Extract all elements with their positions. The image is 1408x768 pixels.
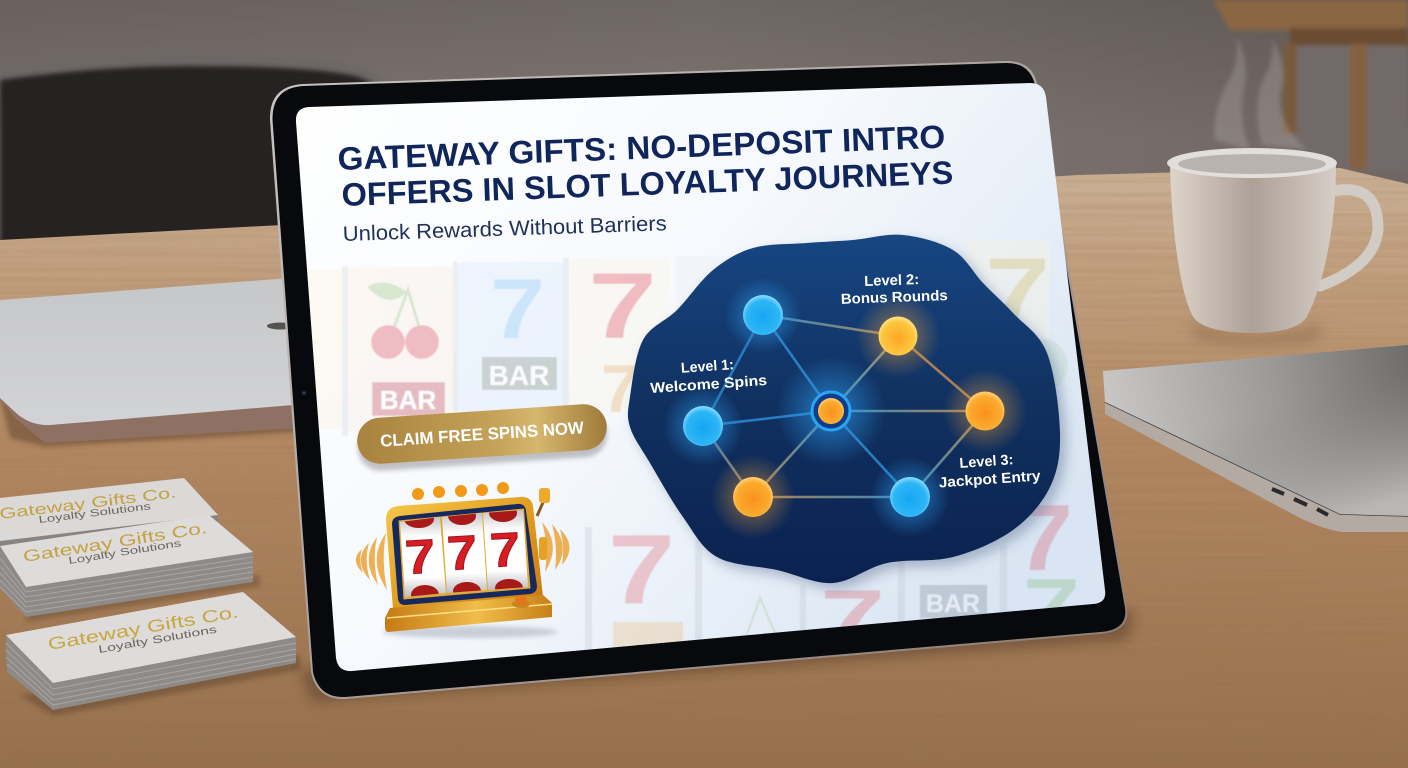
- camera dot: [302, 391, 306, 395]
- card stack 2: [0, 515, 260, 622]
- title: GATEWAY GIFTS: NO-DEPOSIT INTRO: [337, 119, 946, 177]
- blue seven: 7: [490, 262, 545, 357]
- card stack 1: [0, 478, 218, 555]
- sevens: 7: [404, 530, 437, 585]
- node: yellow: [878, 316, 918, 356]
- node: orange right: [966, 392, 1004, 430]
- label: level 1: Welcome Spins: [650, 373, 768, 397]
- card stack 2: Gateway Gifts Co.: [22, 520, 208, 566]
- label: level 1: [650, 360, 766, 393]
- node glows: [663, 277, 1027, 539]
- tablet: [270, 61, 1127, 699]
- business cards: [0, 478, 300, 716]
- label: level 3: Level 3:: [959, 452, 1014, 472]
- title: [338, 126, 952, 206]
- faded slot reels background, bottom row: 7: [820, 576, 885, 656]
- light bulbs: [412, 482, 509, 500]
- card stack 1: Gateway Gifts Co.: [0, 484, 177, 523]
- steam above the mug: [1215, 36, 1308, 150]
- node: blue left: [683, 406, 723, 446]
- label: level 2: Bonus Rounds: [841, 288, 948, 308]
- sound waves: [356, 522, 570, 590]
- card stack 3: [6, 592, 300, 716]
- tablet shadow on desk: [300, 610, 1135, 702]
- reels: [400, 510, 528, 597]
- node: orange bottom: [733, 477, 773, 517]
- tablet black bezel: [272, 63, 1125, 697]
- label: level 1: Level 1:: [680, 357, 734, 377]
- sevens: [406, 532, 518, 574]
- tablet metal edge: [270, 61, 1127, 699]
- call to action button: [356, 403, 609, 472]
- wooden desk: [0, 165, 1408, 768]
- gold inner frame: [398, 508, 530, 600]
- slot machine icon: [356, 482, 570, 638]
- faded slot reels background, bottom row: 7: [608, 514, 675, 624]
- central hub node: [812, 392, 850, 430]
- bar sign red: BAR: [380, 385, 436, 415]
- sevens: 7: [489, 523, 522, 578]
- right laptop: [1103, 345, 1408, 532]
- left laptop: [0, 278, 305, 447]
- red seven: 7: [588, 253, 657, 358]
- faded slot reels background, bottom row: [585, 339, 1080, 656]
- blurred side table and legs: [1213, 0, 1408, 170]
- node: blue top: [743, 295, 783, 335]
- sevens: 7: [446, 526, 479, 581]
- yellow seven: 7: [985, 240, 1050, 342]
- faded slot reels background, bottom row: 7: [1023, 564, 1080, 649]
- label: level 2: Level 2:: [864, 272, 919, 290]
- navy window: [392, 504, 537, 605]
- subtitle: Unlock Rewards Without Barriers: [342, 212, 667, 246]
- label: level 3: Jackpot Entry: [938, 468, 1041, 491]
- faded slot reels background, bottom row: BAR: [926, 590, 980, 618]
- faded slot reels background, bottom row: 7: [1015, 485, 1073, 590]
- bar sign blue: BAR: [489, 360, 549, 391]
- network blob panel: [628, 235, 1066, 589]
- chair back rim: [0, 54, 392, 130]
- lever: [537, 498, 545, 516]
- card stack 3: Gateway Gifts Co.: [46, 602, 240, 654]
- tablet screen: [280, 70, 1120, 690]
- card stack 1: Loyalty Solutions: [38, 501, 152, 526]
- bar sign red: [372, 382, 445, 416]
- connection lines: [703, 315, 985, 497]
- faint logo: [267, 322, 293, 330]
- base shadow: [382, 626, 558, 638]
- call to action button: CLAIM FREE SPINS NOW: [380, 418, 585, 451]
- button: [512, 595, 530, 608]
- cabinet: [386, 497, 543, 609]
- title: OFFERS IN SLOT LOYALTY JOURNEYS: [341, 155, 954, 213]
- faded slot reels background, top row: [306, 240, 1050, 436]
- coffee mug: [1167, 148, 1378, 346]
- background wall: [0, 0, 1408, 260]
- card stack 2: Loyalty Solutions: [68, 538, 182, 567]
- label: level 3: [937, 450, 1041, 491]
- cherry: [367, 283, 439, 359]
- blurred dark chair: [0, 66, 392, 260]
- node: blue bottom: [890, 477, 930, 517]
- machine base: [385, 595, 552, 632]
- card stack 3: Loyalty Solutions: [97, 624, 218, 656]
- orange seven lower: 7: [601, 351, 639, 427]
- screen background: [280, 70, 1120, 690]
- label: level 2: [840, 271, 948, 308]
